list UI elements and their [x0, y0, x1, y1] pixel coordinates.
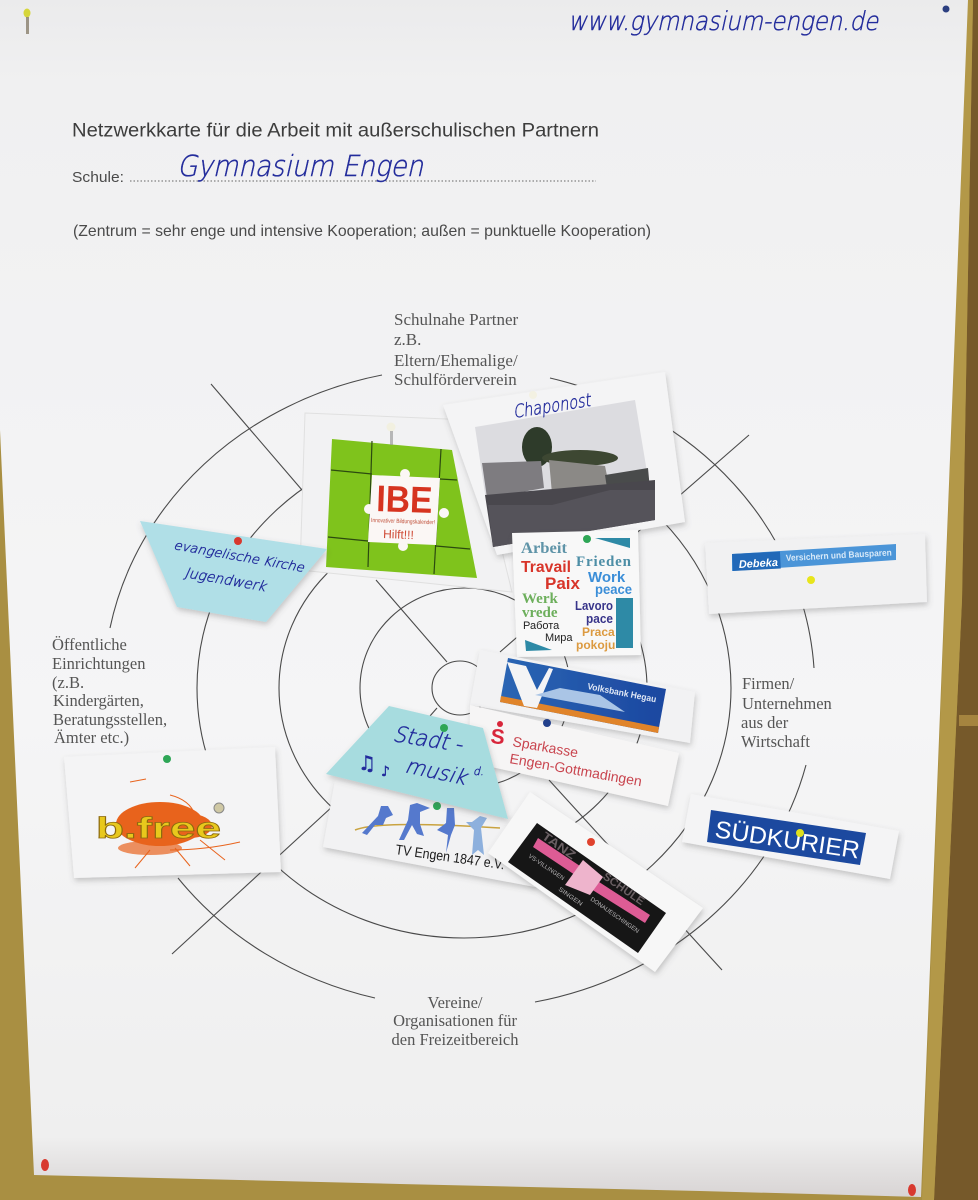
sticky note: Stadtmusik: d.: [473, 765, 483, 778]
label: schulnahe Partner: Eltern/Ehemalige/: [394, 351, 518, 370]
label: Vereine: den Freizeitbereich: [392, 1030, 519, 1049]
card: Debeka: Debeka: [739, 557, 778, 571]
label: öffentliche Einrichtungen: (z.B.: [52, 673, 84, 692]
card: dance school black logo: SINGEN: [557, 887, 583, 908]
label: öffentliche Einrichtungen: Beratungsstellen,: [53, 710, 167, 729]
legend note: (Zentrum = sehr enge und intensive Kooperation; außen = punktuelle Kooperation): [73, 223, 651, 240]
label: Firmen: aus der: [741, 713, 789, 732]
card: Arbeit für Frieden multilingual poster: Frieden: [576, 554, 632, 570]
card: Arbeit für Frieden multilingual poster: pace: [586, 611, 613, 626]
card: Volksbank Hegau: [470, 650, 695, 743]
card: Debeka: Versichern und Bausparen: [786, 547, 892, 563]
title: Netzwerkkarte für die Arbeit mit außerschulischen Partnern: [72, 120, 599, 142]
card: Arbeit für Frieden multilingual poster: Travail: [521, 559, 571, 576]
card: Südkurier: SÜDKURIER: [713, 816, 862, 865]
card: Arbeit für Frieden multilingual poster: Work: [588, 569, 626, 586]
label: schulnahe Partner: Schulnahe Partner: [394, 310, 518, 329]
sticky note: Stadtmusik: ♫: [358, 751, 376, 775]
card: IBE puzzle: Hilft!!!: [383, 527, 414, 542]
label: öffentliche Einrichtungen: Kindergärten,: [53, 691, 144, 710]
pin: [440, 724, 448, 732]
card: Volksbank Hegau: Volksbank Hegau: [587, 681, 657, 704]
pin: [163, 755, 171, 763]
school line: [72, 149, 596, 186]
b-free logo text: b.free: [96, 812, 221, 845]
label: öffentliche Einrichtungen: Öffentliche: [52, 635, 127, 654]
card: Südkurier: [682, 794, 899, 879]
label: Firmen: Firmen/: [742, 674, 795, 693]
card: Arbeit für Frieden multilingual poster: Werk: [522, 591, 558, 607]
card: TV Engen 1847: [323, 780, 560, 887]
card: Arbeit für Frieden multilingual poster: Praca: [582, 625, 615, 639]
label: schulnahe Partner: [394, 310, 518, 389]
sticky note: evangelische Kirche: [140, 521, 327, 622]
pin: [583, 535, 591, 543]
label: öffentliche Einrichtungen: Ämter etc.): [54, 728, 129, 747]
card: dance school black logo: DONAUESCHINGEN: [589, 897, 640, 935]
school line: Schule:: [72, 169, 124, 186]
pin: [587, 838, 595, 846]
card: Arbeit für Frieden multilingual poster: Paix: [545, 574, 581, 593]
label: öffentliche Einrichtungen: [52, 635, 167, 747]
card: dance school black logo: SCHULE: [600, 871, 646, 908]
card: Sparkasse: S: [489, 725, 506, 749]
label: Firmen: [741, 674, 832, 751]
card: Sparkasse: [469, 705, 679, 806]
label: Firmen: Unternehmen: [742, 694, 832, 713]
label: Firmen: Wirtschaft: [741, 732, 810, 751]
card: TV Engen 1847: TV Engen 1847 e.V.: [395, 841, 506, 872]
card: Arbeit für Frieden multilingual poster: Мира: [545, 632, 573, 644]
pin: [807, 576, 815, 584]
sticky note: Stadtmusik: [326, 706, 508, 819]
card: Debeka: [705, 534, 927, 614]
label: Vereine: Vereine/: [428, 993, 483, 1012]
card: Arbeit für Frieden multilingual poster: peace: [595, 581, 632, 597]
IBE text: IBE: [376, 478, 433, 521]
school line: Gymnasium Engen: [177, 149, 424, 183]
card: Arbeit für Frieden multilingual poster: vrede: [522, 605, 558, 621]
card: Arbeit für Frieden multilingual poster: pokoju: [576, 638, 615, 652]
handwriting: Chaponost: Chaponost: [511, 390, 593, 423]
pin: [386, 422, 396, 432]
pin: [529, 391, 537, 399]
sticky note: Stadtmusik: ♪: [381, 764, 390, 780]
card: IBE puzzle: [300, 413, 512, 592]
card: Sparkasse: Sparkasse: [511, 733, 580, 760]
sticky note: Stadtmusik: musik: [403, 753, 471, 790]
pin: [796, 829, 804, 837]
label: schulnahe Partner: z.B.: [394, 330, 421, 349]
handwritten URL: www.gymnasium-engen.de: [568, 7, 879, 37]
card: dance school black logo: VS-VILLINGEN: [527, 854, 565, 882]
pin: [433, 802, 441, 810]
label: schulnahe Partner: Schulförderverein: [394, 370, 517, 389]
sticky note: Stadtmusik: Stadt -: [391, 722, 465, 758]
label: Vereine: [392, 993, 519, 1049]
card: b-free: [64, 747, 281, 878]
pin: [234, 537, 242, 545]
label: Vereine: Organisationen für: [393, 1011, 517, 1030]
card: IBE puzzle: Innovativer Bildungskalender!: [371, 518, 435, 526]
card: dance school black logo: TANZ: [539, 829, 578, 862]
network diagram: rings and spokes: [110, 375, 814, 1002]
card: Arbeit für Frieden multilingual poster: Arbeit: [521, 540, 568, 557]
label: öffentliche Einrichtungen: Einrichtungen: [52, 654, 145, 673]
sticky note: evangelische Kirche: evangelische Kirche: [172, 537, 306, 575]
card: Chaponost photo: [443, 372, 685, 555]
pin: [543, 719, 551, 727]
card: Arbeit für Frieden multilingual poster: Lavoro: [575, 598, 613, 613]
card: Sparkasse: Engen-Gottmadingen: [508, 750, 643, 789]
card: dance school black logo: [488, 792, 703, 972]
sticky note: evangelische Kirche: Jugendwerk: [182, 565, 269, 596]
card: Arbeit für Frieden multilingual poster: [512, 530, 641, 657]
card: Arbeit für Frieden multilingual poster: Работа: [523, 620, 560, 632]
